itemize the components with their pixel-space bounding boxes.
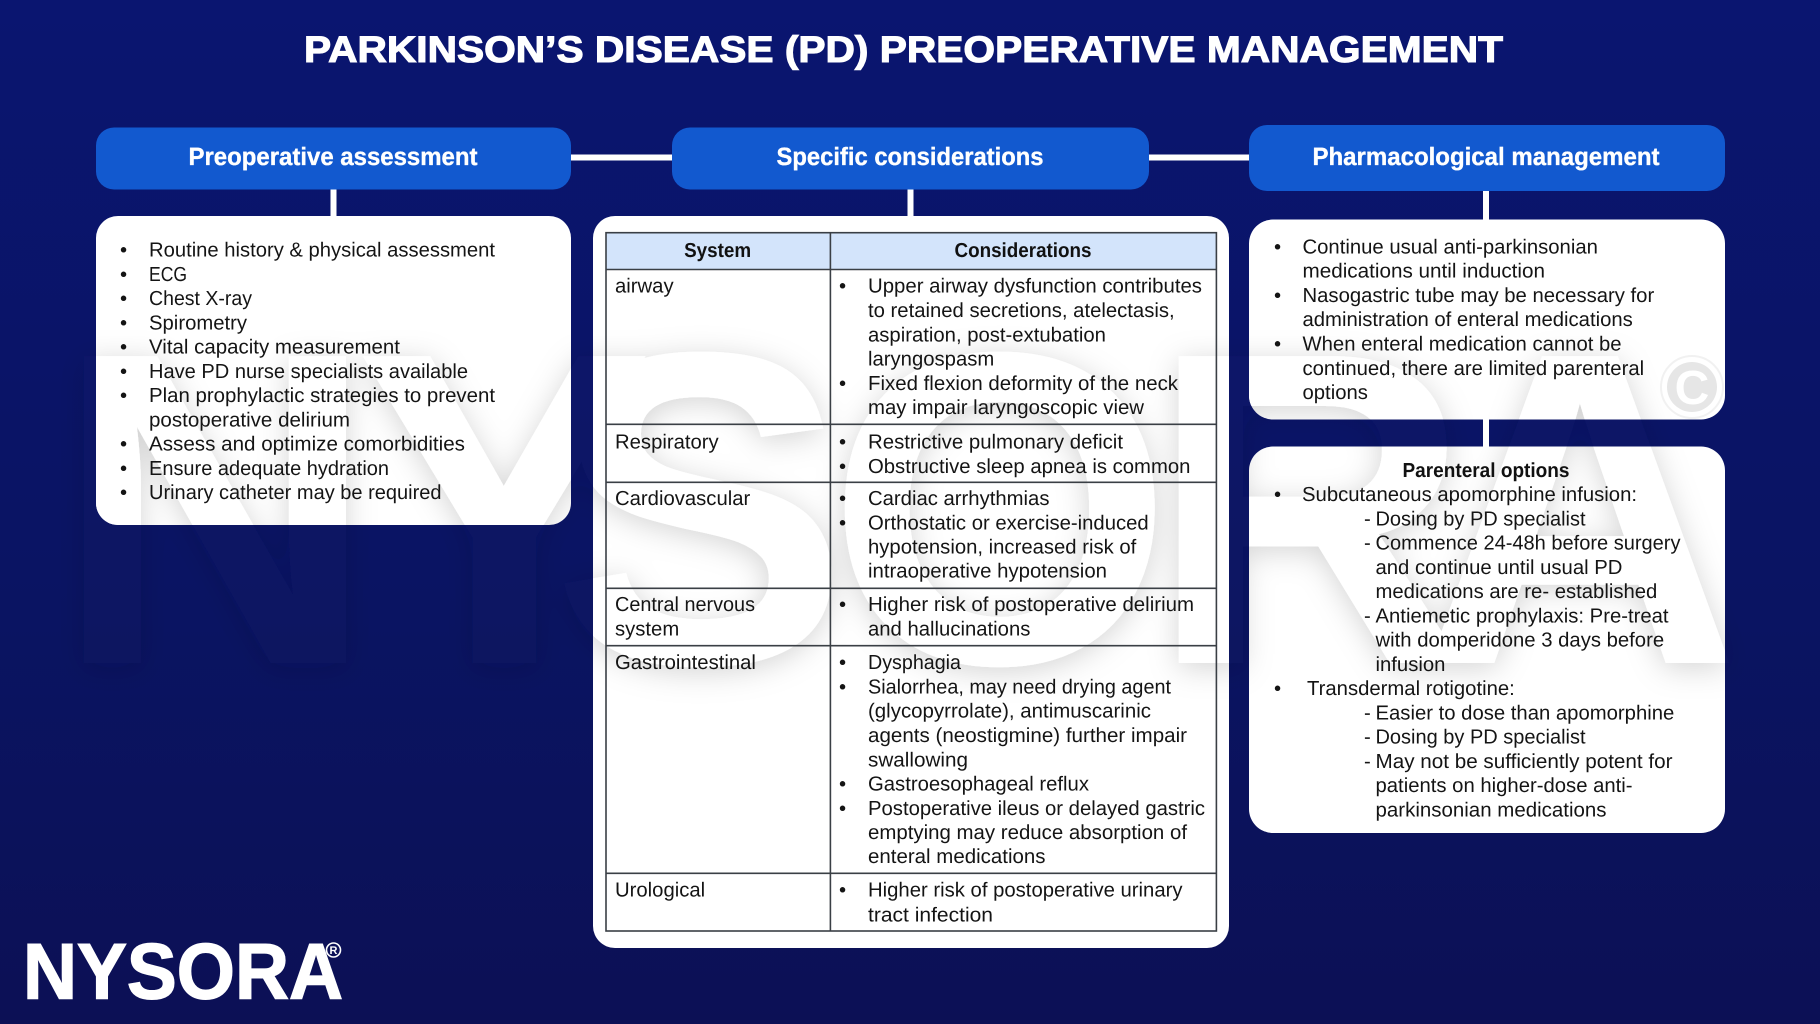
panel: preoperative assessment list: • [120, 312, 127, 334]
row: central nervous system: Higher risk of postoperative delirium [868, 594, 1194, 616]
row: airway: • [839, 276, 846, 298]
panel: parenteral options: • [1274, 484, 1281, 506]
panel: pharmacological management list: • [1274, 236, 1281, 258]
panel: preoperative assessment list: Ensure adequate hydration [149, 458, 389, 480]
white panels [96, 216, 1725, 948]
row: gastrointestinal [615, 652, 1205, 868]
row: central nervous system: Central nervous [615, 594, 755, 616]
panel: pharmacological management list: medications until induction [1302, 260, 1545, 282]
table header row: Considerations [954, 240, 1092, 262]
row: airway [615, 276, 1202, 419]
row: cardiovascular: intraoperative hypotension [868, 561, 1107, 583]
row: central nervous system [615, 594, 1194, 641]
row: airway: Upper airway dysfunction contributes [868, 276, 1202, 298]
panel: parenteral options: - [1364, 533, 1371, 555]
panel: pharmacological management list: administration of enteral medications [1302, 309, 1633, 331]
panel: parenteral options: Parenteral options [1402, 460, 1570, 482]
row: airway: aspiration, post-extubation [868, 324, 1106, 346]
panel: pharmacological management list [1274, 236, 1654, 404]
row: gastrointestinal: • [839, 652, 846, 674]
row: central nervous system: • [839, 594, 846, 616]
table header row [606, 233, 1216, 270]
panel: pharmacological management list: • [1274, 285, 1281, 307]
panel: parenteral options: Antiemetic prophylaxis: Pre-treat [1376, 606, 1669, 628]
panel: parenteral options: Transdermal rotigotine: [1307, 678, 1515, 700]
watermark on panels: A [1419, 259, 1741, 758]
panel: pharmacological management list: • [1274, 334, 1281, 356]
row: central nervous system: and hallucinations [868, 619, 1030, 641]
panel: parenteral options: - [1364, 606, 1371, 628]
panel: parenteral options: Dosing by PD specialist [1376, 727, 1586, 749]
panel: preoperative assessment list: • [120, 264, 127, 286]
header: preoperative assessment [96, 128, 571, 190]
panel: parenteral options: Commence 24-48h before surgery [1376, 533, 1681, 555]
panel: parenteral options: - [1364, 702, 1371, 724]
header: preoperative assessment: Preoperative assessment [188, 143, 478, 171]
panel: preoperative assessment list: Routine history & physical assessment [149, 240, 495, 262]
watermark on background: O [827, 259, 1173, 758]
row: gastrointestinal: • [839, 677, 846, 699]
row: cardiovascular: hypotension, increased risk of [868, 536, 1137, 558]
header: pharmacological management: Pharmacological management [1312, 143, 1660, 171]
watermark on panels: R [1149, 259, 1471, 758]
row: respiratory: Respiratory [615, 431, 720, 453]
row: airway: to retained secretions, atelectasis, [868, 300, 1175, 322]
watermark on panels: O [827, 259, 1173, 758]
panel: preoperative assessment list [120, 240, 495, 504]
row: respiratory [615, 431, 1190, 478]
watermark on panels: C [1675, 362, 1709, 415]
row: gastrointestinal: • [839, 798, 846, 820]
panel: parenteral options: infusion [1376, 654, 1445, 676]
panel: preoperative assessment list: postoperative delirium [149, 409, 350, 431]
table: system considerations [606, 233, 1216, 931]
row: airway: laryngospasm [868, 349, 994, 371]
row: airway: • [839, 373, 846, 395]
panel: preoperative assessment list: Assess and optimize comorbidities [149, 434, 465, 456]
row: cardiovascular: Cardiovascular [615, 488, 751, 510]
row: gastrointestinal: swallowing [868, 749, 968, 771]
logo: NYSORA: NYSORA [23, 926, 343, 1016]
header: specific considerations: Specific considerations [776, 143, 1044, 171]
panel: preoperative assessment list: • [120, 336, 127, 358]
row: gastrointestinal: Dysphagia [868, 652, 962, 674]
panel: preoperative assessment list: • [120, 434, 127, 456]
row: gastrointestinal: emptying may reduce absorption of [868, 822, 1187, 844]
header: pharmacological management [1249, 125, 1725, 191]
panel: preoperative assessment list: • [120, 361, 127, 383]
watermark on background: N [54, 259, 376, 758]
panel: parenteral options: - [1364, 751, 1371, 773]
row: airway: may impair laryngoscopic view [868, 397, 1144, 419]
panel: parenteral options [1274, 460, 1681, 822]
panel: preoperative assessment list: • [120, 458, 127, 480]
title: PARKINSON’S DISEASE (PD) PREOPERATIVE MANAGEMENT [304, 29, 1503, 70]
watermark on background: Y [355, 259, 653, 758]
panel: preoperative assessment list: • [120, 482, 127, 504]
panel: preoperative assessment list: Have PD nurse specialists available [149, 361, 468, 383]
header: specific considerations [672, 128, 1149, 190]
watermark on panels: Y [355, 259, 653, 758]
row: gastrointestinal: • [839, 773, 846, 795]
row: urological: Urological [615, 880, 705, 902]
row: gastrointestinal: enteral medications [868, 846, 1046, 868]
row: cardiovascular [615, 488, 1149, 583]
row: gastrointestinal: agents (neostigmine) further impair [868, 725, 1187, 747]
row: cardiovascular: Orthostatic or exercise-induced [868, 512, 1149, 534]
panel: pharmacological management list: continued, there are limited parenteral [1302, 358, 1644, 380]
row: central nervous system: system [615, 619, 679, 641]
row: respiratory: • [839, 431, 846, 453]
row: urological [615, 880, 1183, 926]
row: cardiovascular: • [839, 512, 846, 534]
table grid [606, 233, 1216, 931]
panel: pharmacological management list: options [1302, 382, 1368, 404]
watermark on background [54, 259, 1741, 758]
row: airway: Fixed flexion deformity of the neck [868, 373, 1179, 395]
table header row: System [684, 240, 751, 262]
panel: parenteral options: Subcutaneous apomorphine infusion: [1302, 484, 1637, 506]
row: urological: • [839, 880, 846, 902]
row: gastrointestinal: Sialorrhea, may need drying agent [868, 677, 1171, 699]
logo: NYSORA: R [330, 945, 338, 957]
row: gastrointestinal: Gastroesophageal reflux [868, 773, 1089, 795]
panel: pharmacological management list: Nasogastric tube may be necessary for [1302, 285, 1654, 307]
panel: parenteral options: - [1364, 727, 1371, 749]
watermark on panels [96, 344, 1725, 684]
panel: parenteral options: - [1364, 508, 1371, 530]
panel: preoperative assessment list: ECG [149, 264, 187, 286]
panel: parenteral options: medications are re- established [1376, 581, 1657, 603]
watermark on background: S [551, 259, 849, 758]
panel: parenteral options: patients on higher-dose anti- [1376, 775, 1633, 797]
panel: preoperative assessment list: • [120, 385, 127, 407]
row: respiratory: • [839, 456, 846, 478]
panel: preoperative assessment list: • [120, 288, 127, 310]
panel: parenteral options: • [1274, 678, 1281, 700]
row: cardiovascular: Cardiac arrhythmias [868, 488, 1049, 510]
row: airway: airway [615, 276, 674, 298]
panel: preoperative assessment list: Chest X-ray [149, 288, 253, 310]
row: respiratory: Restrictive pulmonary deficit [868, 431, 1123, 453]
watermark on panels: N [54, 259, 376, 758]
panel: parenteral options: and continue until usual PD [1376, 557, 1622, 579]
panel: preoperative assessment list: • [120, 240, 127, 262]
panel: parenteral options: Easier to dose than apomorphine [1376, 702, 1674, 724]
watermark on background: A [1419, 259, 1741, 758]
row: cardiovascular: • [839, 488, 846, 510]
row: gastrointestinal: Gastrointestinal [615, 652, 756, 674]
panel: pharmacological management list: When enteral medication cannot be [1302, 334, 1622, 356]
row: gastrointestinal: Postoperative ileus or delayed gastric [868, 798, 1205, 820]
row: urological: Higher risk of postoperative urinary [868, 880, 1183, 902]
panel: preoperative assessment list: Urinary catheter may be required [149, 482, 442, 504]
panel: preoperative assessment list: Plan prophylactic strategies to prevent [149, 385, 495, 407]
panel: parenteral options: May not be sufficiently potent for [1376, 751, 1673, 773]
row: gastrointestinal: (glycopyrrolate), antimuscarinic [868, 701, 1151, 723]
connectors between header boxes and panels [330, 154, 1489, 447]
panel: pharmacological management list: Continue usual anti-parkinsonian [1302, 236, 1598, 258]
panel: preoperative assessment list: Spirometry [149, 312, 248, 334]
panel: parenteral options: Dosing by PD specialist [1376, 508, 1586, 530]
panel: preoperative assessment list: Vital capacity measurement [149, 336, 400, 358]
watermark on background: R [1149, 259, 1471, 758]
row: urological: tract infection [868, 904, 993, 926]
panel: parenteral options: with domperidone 3 days before [1374, 630, 1664, 652]
watermark on panels: S [551, 259, 849, 758]
panel: parenteral options: parkinsonian medications [1376, 800, 1606, 822]
row: respiratory: Obstructive sleep apnea is common [868, 456, 1190, 478]
